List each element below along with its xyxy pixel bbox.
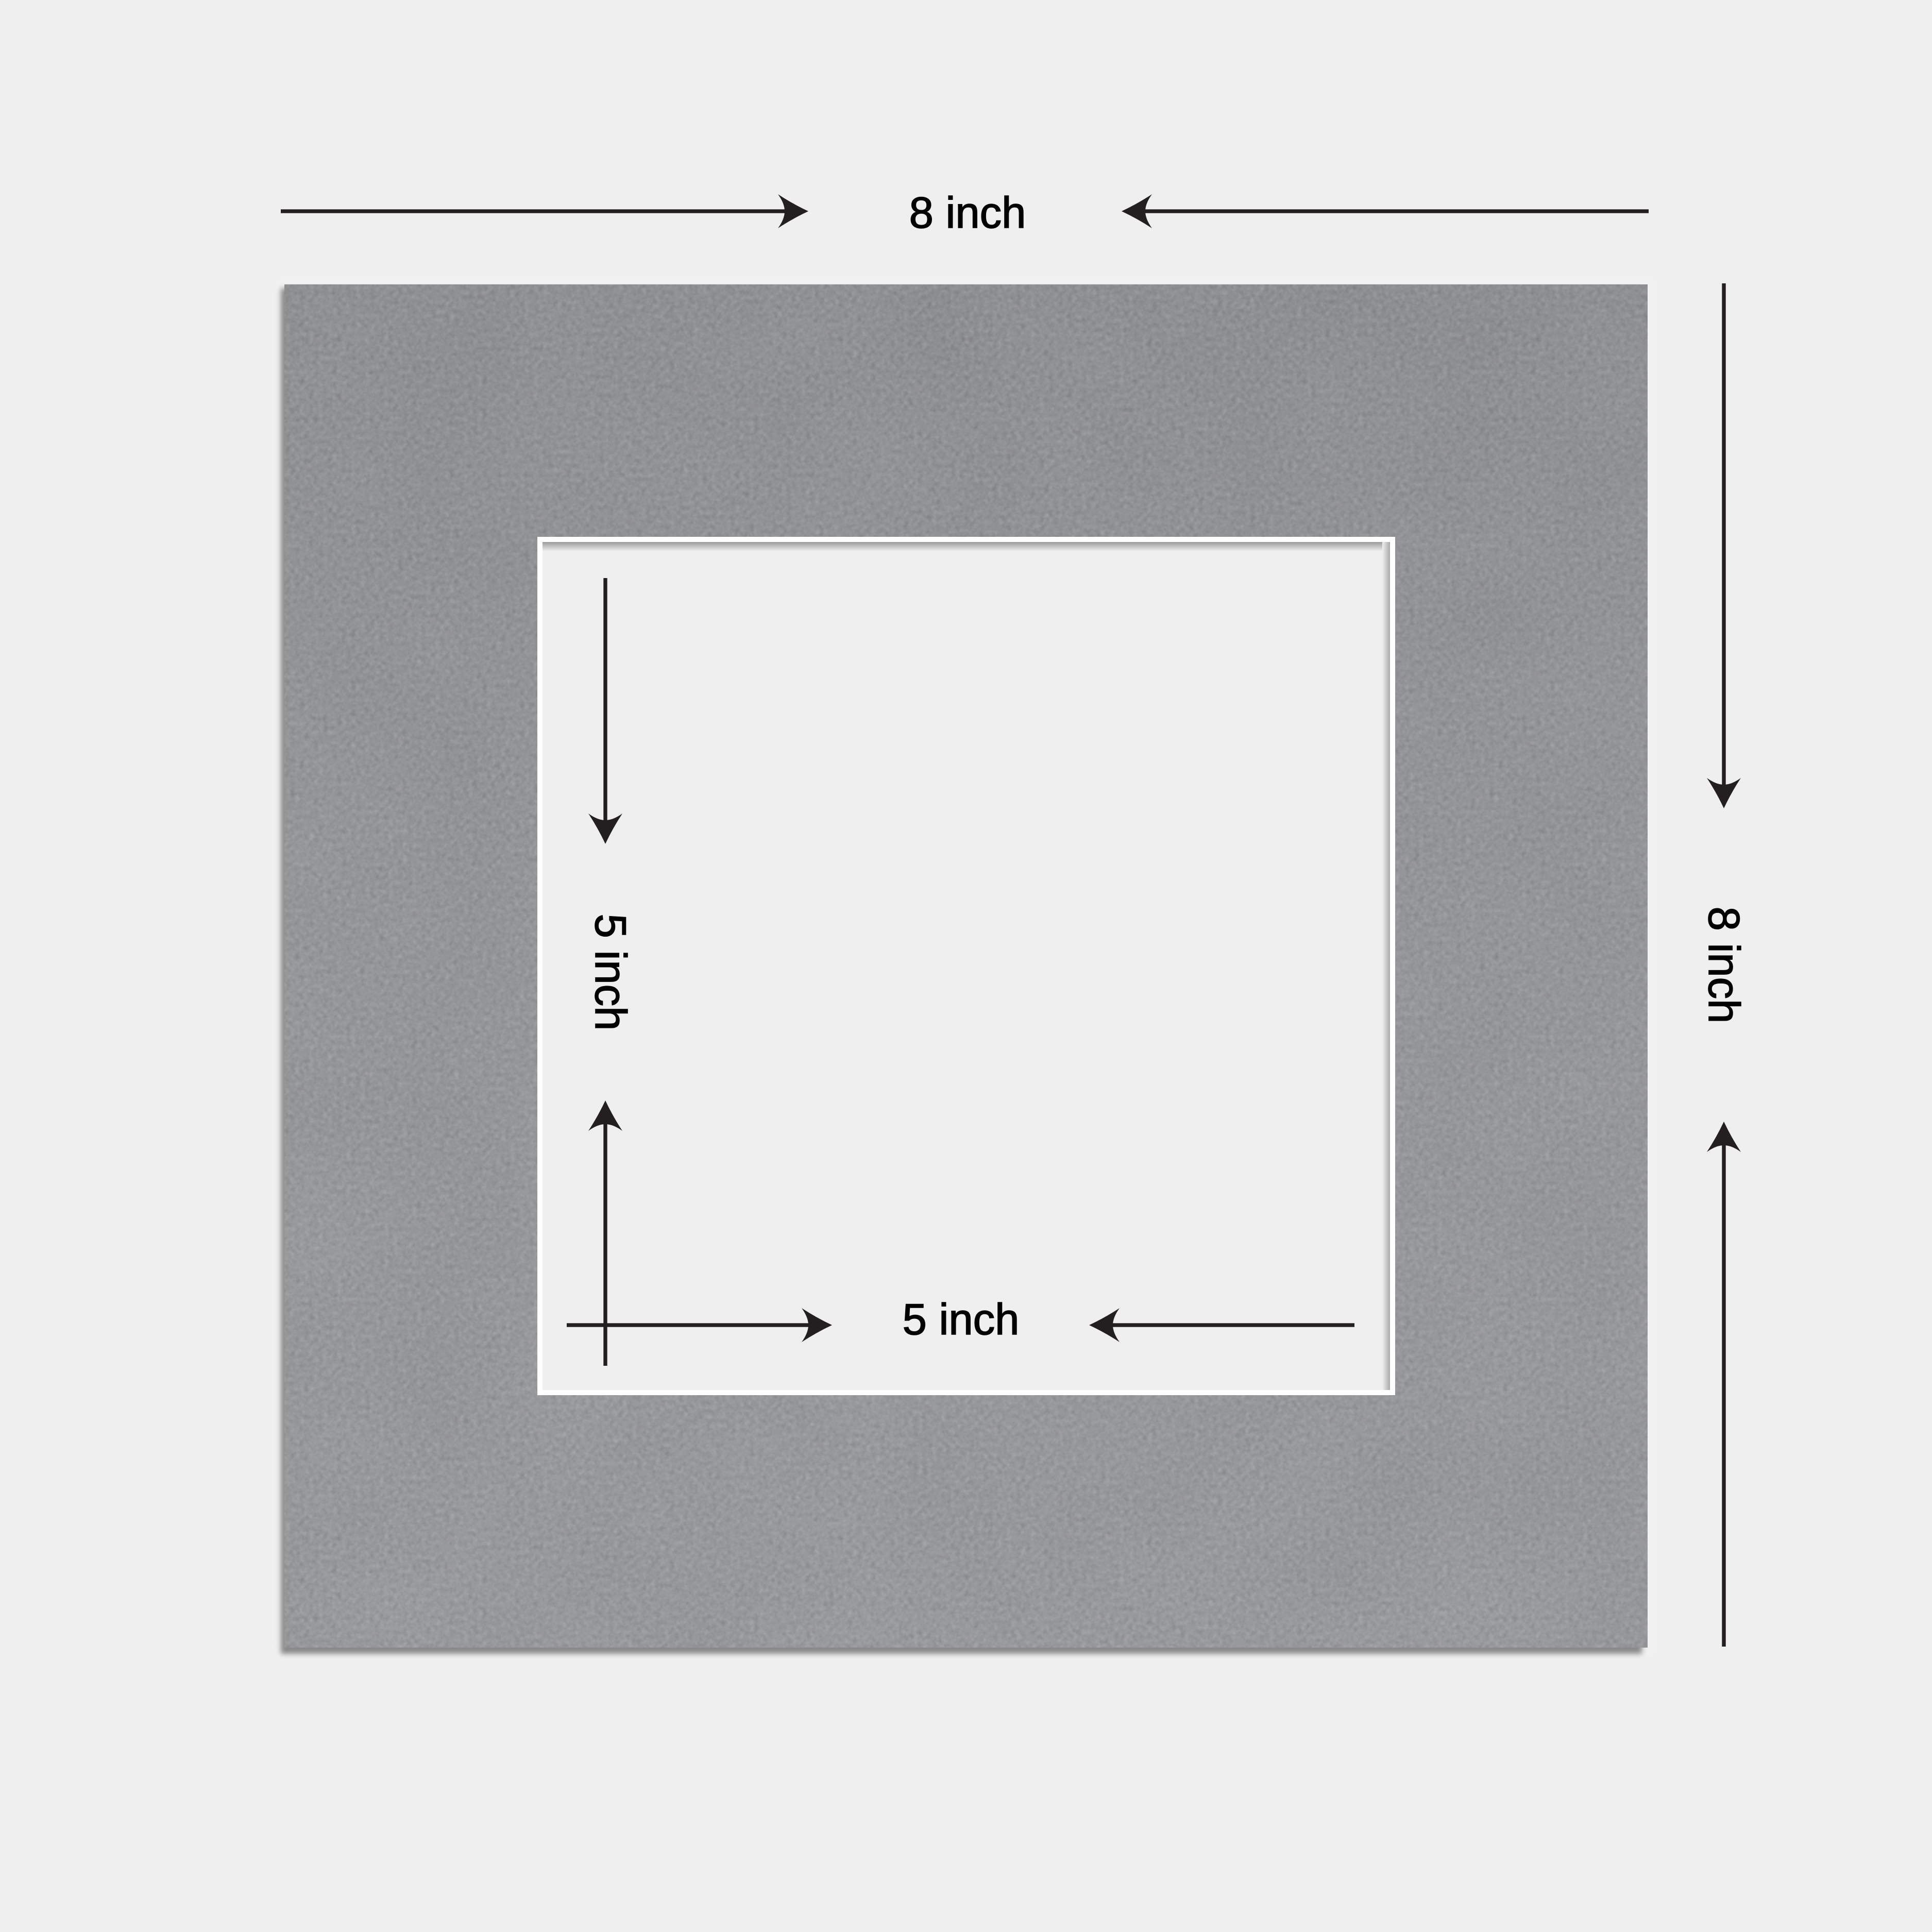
inner window shadow: top [543, 542, 1390, 551]
arrow: window height, bottom [588, 1100, 622, 1366]
arrow: window height, top [588, 578, 622, 844]
arrow: window width, left [567, 1308, 832, 1342]
grey mat surface [284, 284, 1648, 1648]
label: outer width: 8 inch [909, 189, 1026, 238]
arrow: outer height, top [1707, 283, 1741, 808]
label: outer height: 8 inch [1699, 907, 1748, 1023]
inner window shadow: right [1382, 542, 1390, 1390]
mat window backing [537, 537, 1395, 1395]
label: window width: 5 inch [903, 1295, 1019, 1344]
label: window height: 5 inch [586, 914, 635, 1030]
panel: mat board [276, 276, 1656, 1656]
mat outer glow [276, 276, 1656, 1656]
white bevel [537, 537, 1395, 1395]
arrow: outer height, bottom [1707, 1122, 1741, 1647]
arrow: window width, right [1089, 1308, 1354, 1342]
mat drop shadow [281, 289, 1642, 1654]
arrow: outer width, right [1122, 194, 1649, 228]
arrow: outer width, left [281, 194, 808, 228]
